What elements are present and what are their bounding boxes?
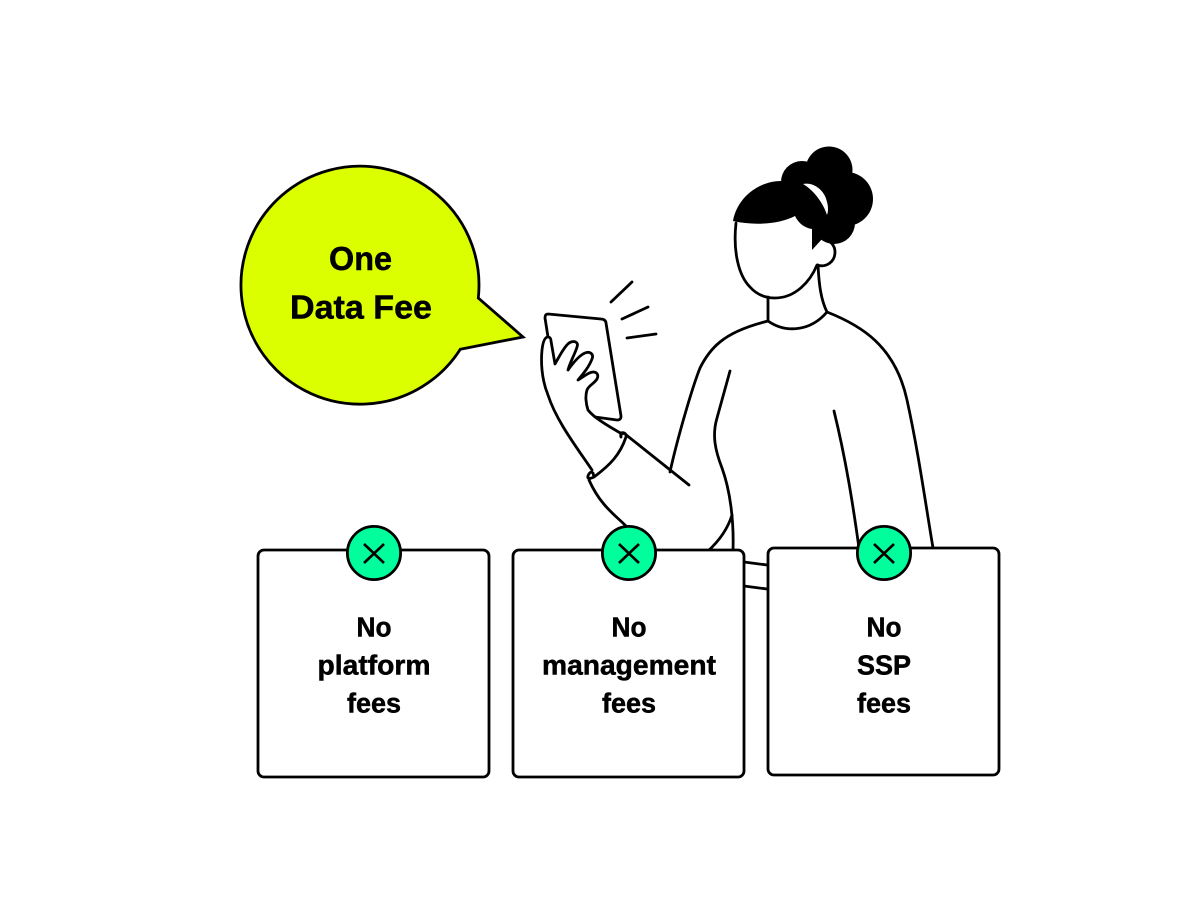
phone signal rays bbox=[611, 282, 656, 338]
face and ear bbox=[735, 223, 835, 298]
speech bubble: One Data Fee bbox=[241, 166, 523, 404]
phone bbox=[545, 314, 621, 420]
icon: cross badge bbox=[857, 526, 911, 580]
straps between boxes bbox=[744, 562, 767, 589]
torso inner lines bbox=[715, 371, 733, 550]
icon: cross badge bbox=[347, 526, 401, 580]
card: No SSP fees: No bbox=[866, 612, 902, 642]
illustration: woman holding phone bbox=[542, 146, 933, 589]
icon: cross badge bbox=[602, 526, 656, 580]
card: No management fees bbox=[513, 526, 744, 777]
card: No management fees: fees bbox=[602, 688, 656, 718]
neck and collar bbox=[768, 265, 827, 329]
hand bbox=[542, 337, 622, 470]
card: No management fees: management bbox=[542, 650, 716, 680]
left shoulder and arm bbox=[670, 321, 768, 472]
card: No SSP fees bbox=[768, 526, 999, 775]
card: No platform fees: platform bbox=[318, 650, 430, 680]
right shoulder and arm bbox=[827, 312, 933, 548]
card: No platform fees: No bbox=[356, 612, 392, 642]
speech bubble: One Data Fee: Data Fee bbox=[290, 288, 432, 326]
card: No platform fees bbox=[258, 526, 489, 777]
card: No SSP fees: SSP bbox=[857, 650, 911, 680]
card: No management fees: No bbox=[612, 612, 646, 642]
sleeve and cuff bbox=[588, 433, 689, 526]
card: No SSP fees: fees bbox=[857, 688, 911, 718]
card: No platform fees: fees bbox=[347, 688, 401, 718]
hair bbox=[733, 146, 873, 250]
speech bubble: One Data Fee: One bbox=[329, 240, 392, 277]
